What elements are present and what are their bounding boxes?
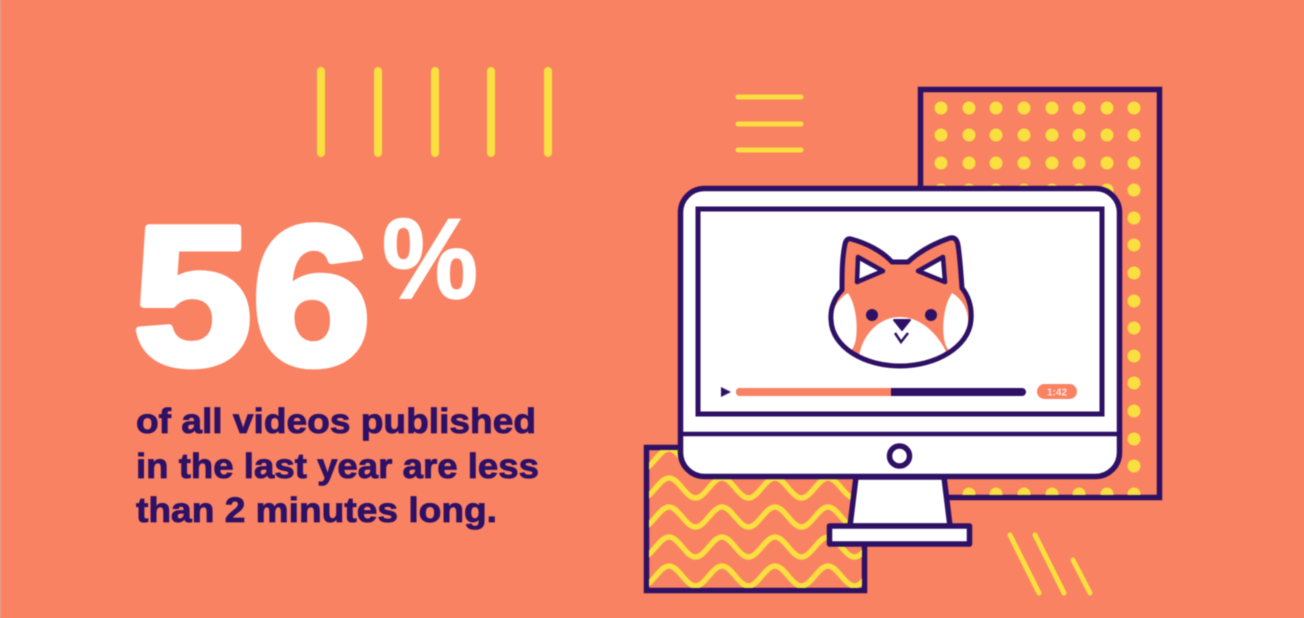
fox face icon [831,238,971,366]
decorative horizontal yellow lines [738,97,801,150]
decorative diagonal yellow lines [1010,535,1090,593]
monitor chin divider [680,432,1120,436]
description text: of all videos published [136,402,536,441]
big statistic: 56%: % [382,196,478,323]
play icon [721,387,731,397]
big statistic: 56%: 56 [133,185,371,406]
ears [857,257,883,282]
description text [136,402,539,530]
dotted panel behind monitor [920,90,1160,500]
video progress bar [721,384,1077,399]
description text: in the last year are less [136,447,539,486]
monitor [680,188,1120,544]
left edge strip [0,0,1,618]
monitor screen [698,209,1102,414]
decorative vertical yellow lines [321,71,548,153]
big statistic: 56% [133,185,478,406]
nose [894,320,910,330]
cheeks and muzzle [832,293,857,353]
monitor base [830,526,970,544]
monitor power button [890,446,910,466]
timestamp pill [1037,384,1077,399]
description text: than 2 minutes long. [136,491,497,530]
monitor stand [850,477,950,526]
wavy panel behind monitor [642,448,881,590]
monitor body [680,188,1120,476]
eyes [866,309,878,321]
video progress bar: 1:42 [1047,388,1067,398]
